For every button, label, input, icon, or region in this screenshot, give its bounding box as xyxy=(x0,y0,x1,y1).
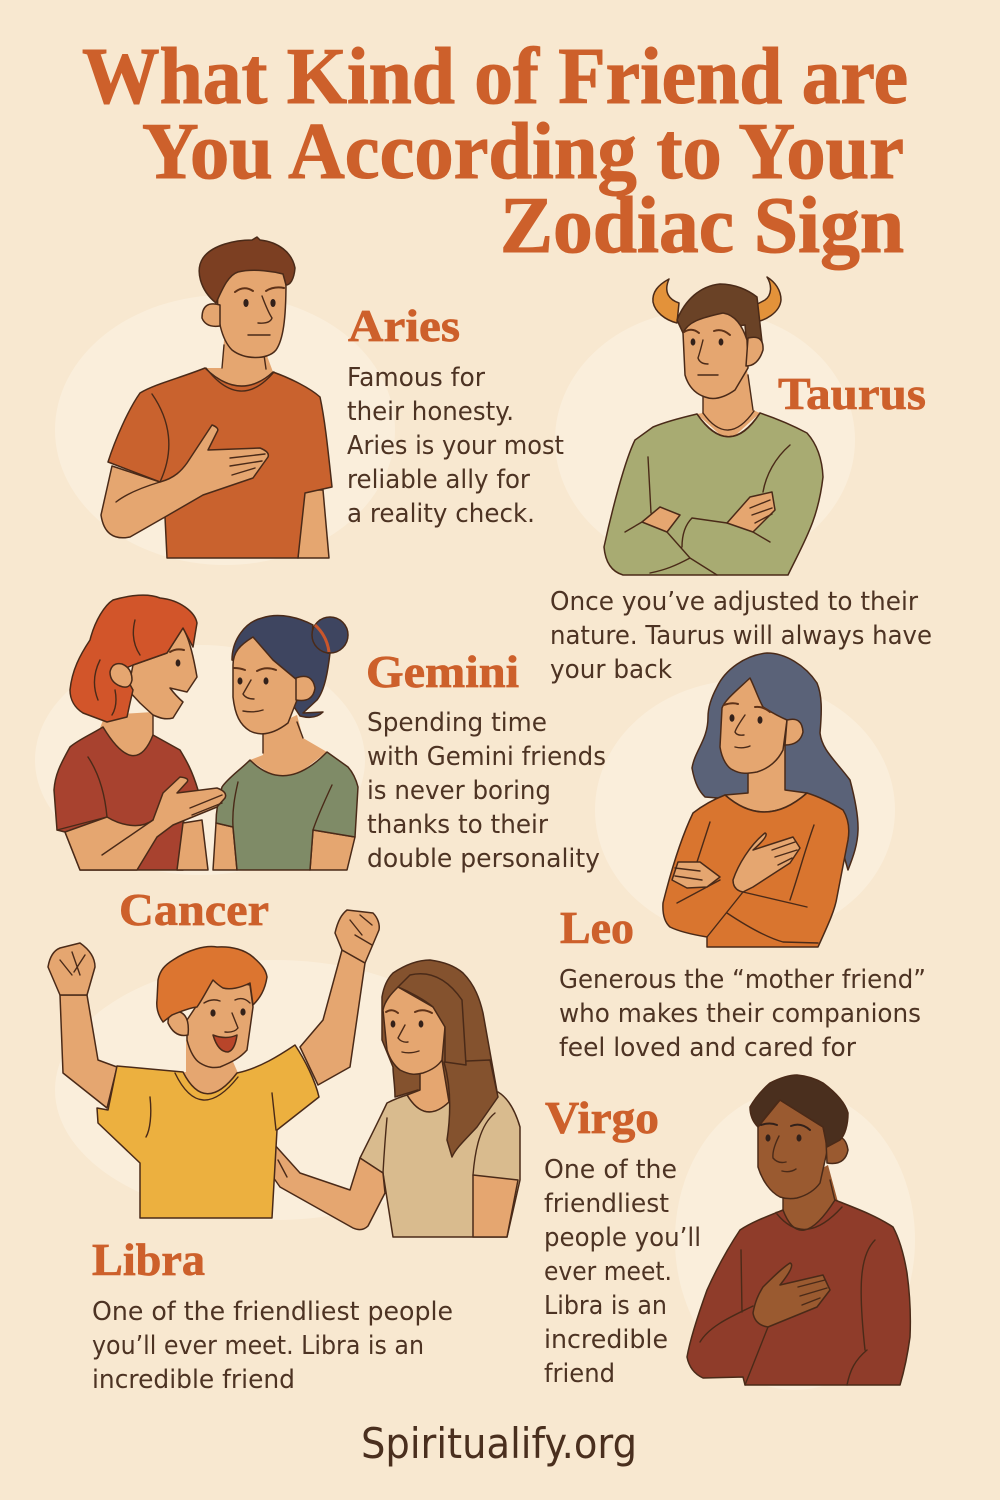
text: Taurus description: nature. Taurus will always have xyxy=(550,621,932,651)
text: Libra description: you’ll ever meet. Libra is an xyxy=(92,1331,424,1361)
heading: Libra: Libra xyxy=(92,1234,205,1285)
text: Gemini description: Spending time xyxy=(367,708,547,738)
heading: Cancer: Cancer xyxy=(119,884,269,935)
text: Leo description: who makes their companions xyxy=(559,999,921,1029)
title: You According to Your xyxy=(142,108,904,196)
text: Aries description: Famous for xyxy=(347,363,485,393)
text: Virgo description: friendliest xyxy=(544,1189,669,1219)
heading: Virgo: Virgo xyxy=(545,1092,659,1143)
text: Libra description xyxy=(92,1297,453,1395)
text: Virgo description: friend xyxy=(544,1359,615,1389)
text: Gemini description: is never boring xyxy=(367,776,551,806)
illustration: Libra woman xyxy=(267,960,520,1237)
text: Aries description: their honesty. xyxy=(347,397,514,427)
text: Libra description: incredible friend xyxy=(92,1365,295,1395)
title xyxy=(82,33,908,270)
text: Aries description: Aries is your most xyxy=(347,431,564,461)
text: Libra description: One of the friendliest people xyxy=(92,1297,453,1327)
text: Virgo description: One of the xyxy=(544,1155,677,1185)
figure: right woman xyxy=(213,616,358,870)
heading: Taurus: Taurus xyxy=(778,368,926,419)
text: Aries description: reliable ally for xyxy=(347,465,530,495)
illustration: Taurus man with horns xyxy=(604,277,823,575)
text: Aries description xyxy=(347,363,564,529)
text: Aries description: a reality check. xyxy=(347,499,535,529)
illustration: Aries man xyxy=(101,237,332,558)
text: Virgo description: people you’ll xyxy=(544,1223,701,1253)
text: Gemini description: thanks to their xyxy=(367,810,548,840)
text: Leo description: feel loved and cared for xyxy=(559,1033,856,1063)
text: Virgo description: Libra is an xyxy=(544,1291,667,1321)
title: What Kind of Friend are xyxy=(82,33,908,121)
text: Leo description: Generous the “mother friend” xyxy=(559,965,926,995)
text: Virgo description: incredible xyxy=(544,1325,668,1355)
figure: red-haired woman xyxy=(54,595,226,870)
text: Gemini description xyxy=(367,708,606,874)
illustration: Leo woman xyxy=(663,653,858,947)
heading: Aries: Aries xyxy=(348,300,460,351)
text: Leo description xyxy=(559,965,926,1063)
text: Taurus description: Once you’ve adjusted to their xyxy=(550,587,918,617)
illustration: Virgo man xyxy=(687,1075,910,1385)
text: Gemini description: double personality xyxy=(367,844,600,874)
illustration: Gemini pair xyxy=(54,595,358,870)
heading: Gemini: Gemini xyxy=(366,646,519,697)
illustration: Cancer man cheering xyxy=(48,910,379,1218)
footer: website name: Spiritualify.org xyxy=(361,1419,637,1468)
text: Virgo description xyxy=(544,1155,701,1389)
heading: Leo: Leo xyxy=(560,902,634,953)
text: Virgo description: ever meet. xyxy=(544,1257,672,1287)
text: Gemini description: with Gemini friends xyxy=(367,742,606,772)
title: Zodiac Sign xyxy=(500,182,904,270)
text: Taurus description: your back xyxy=(550,655,672,685)
text: Taurus description xyxy=(550,587,932,685)
